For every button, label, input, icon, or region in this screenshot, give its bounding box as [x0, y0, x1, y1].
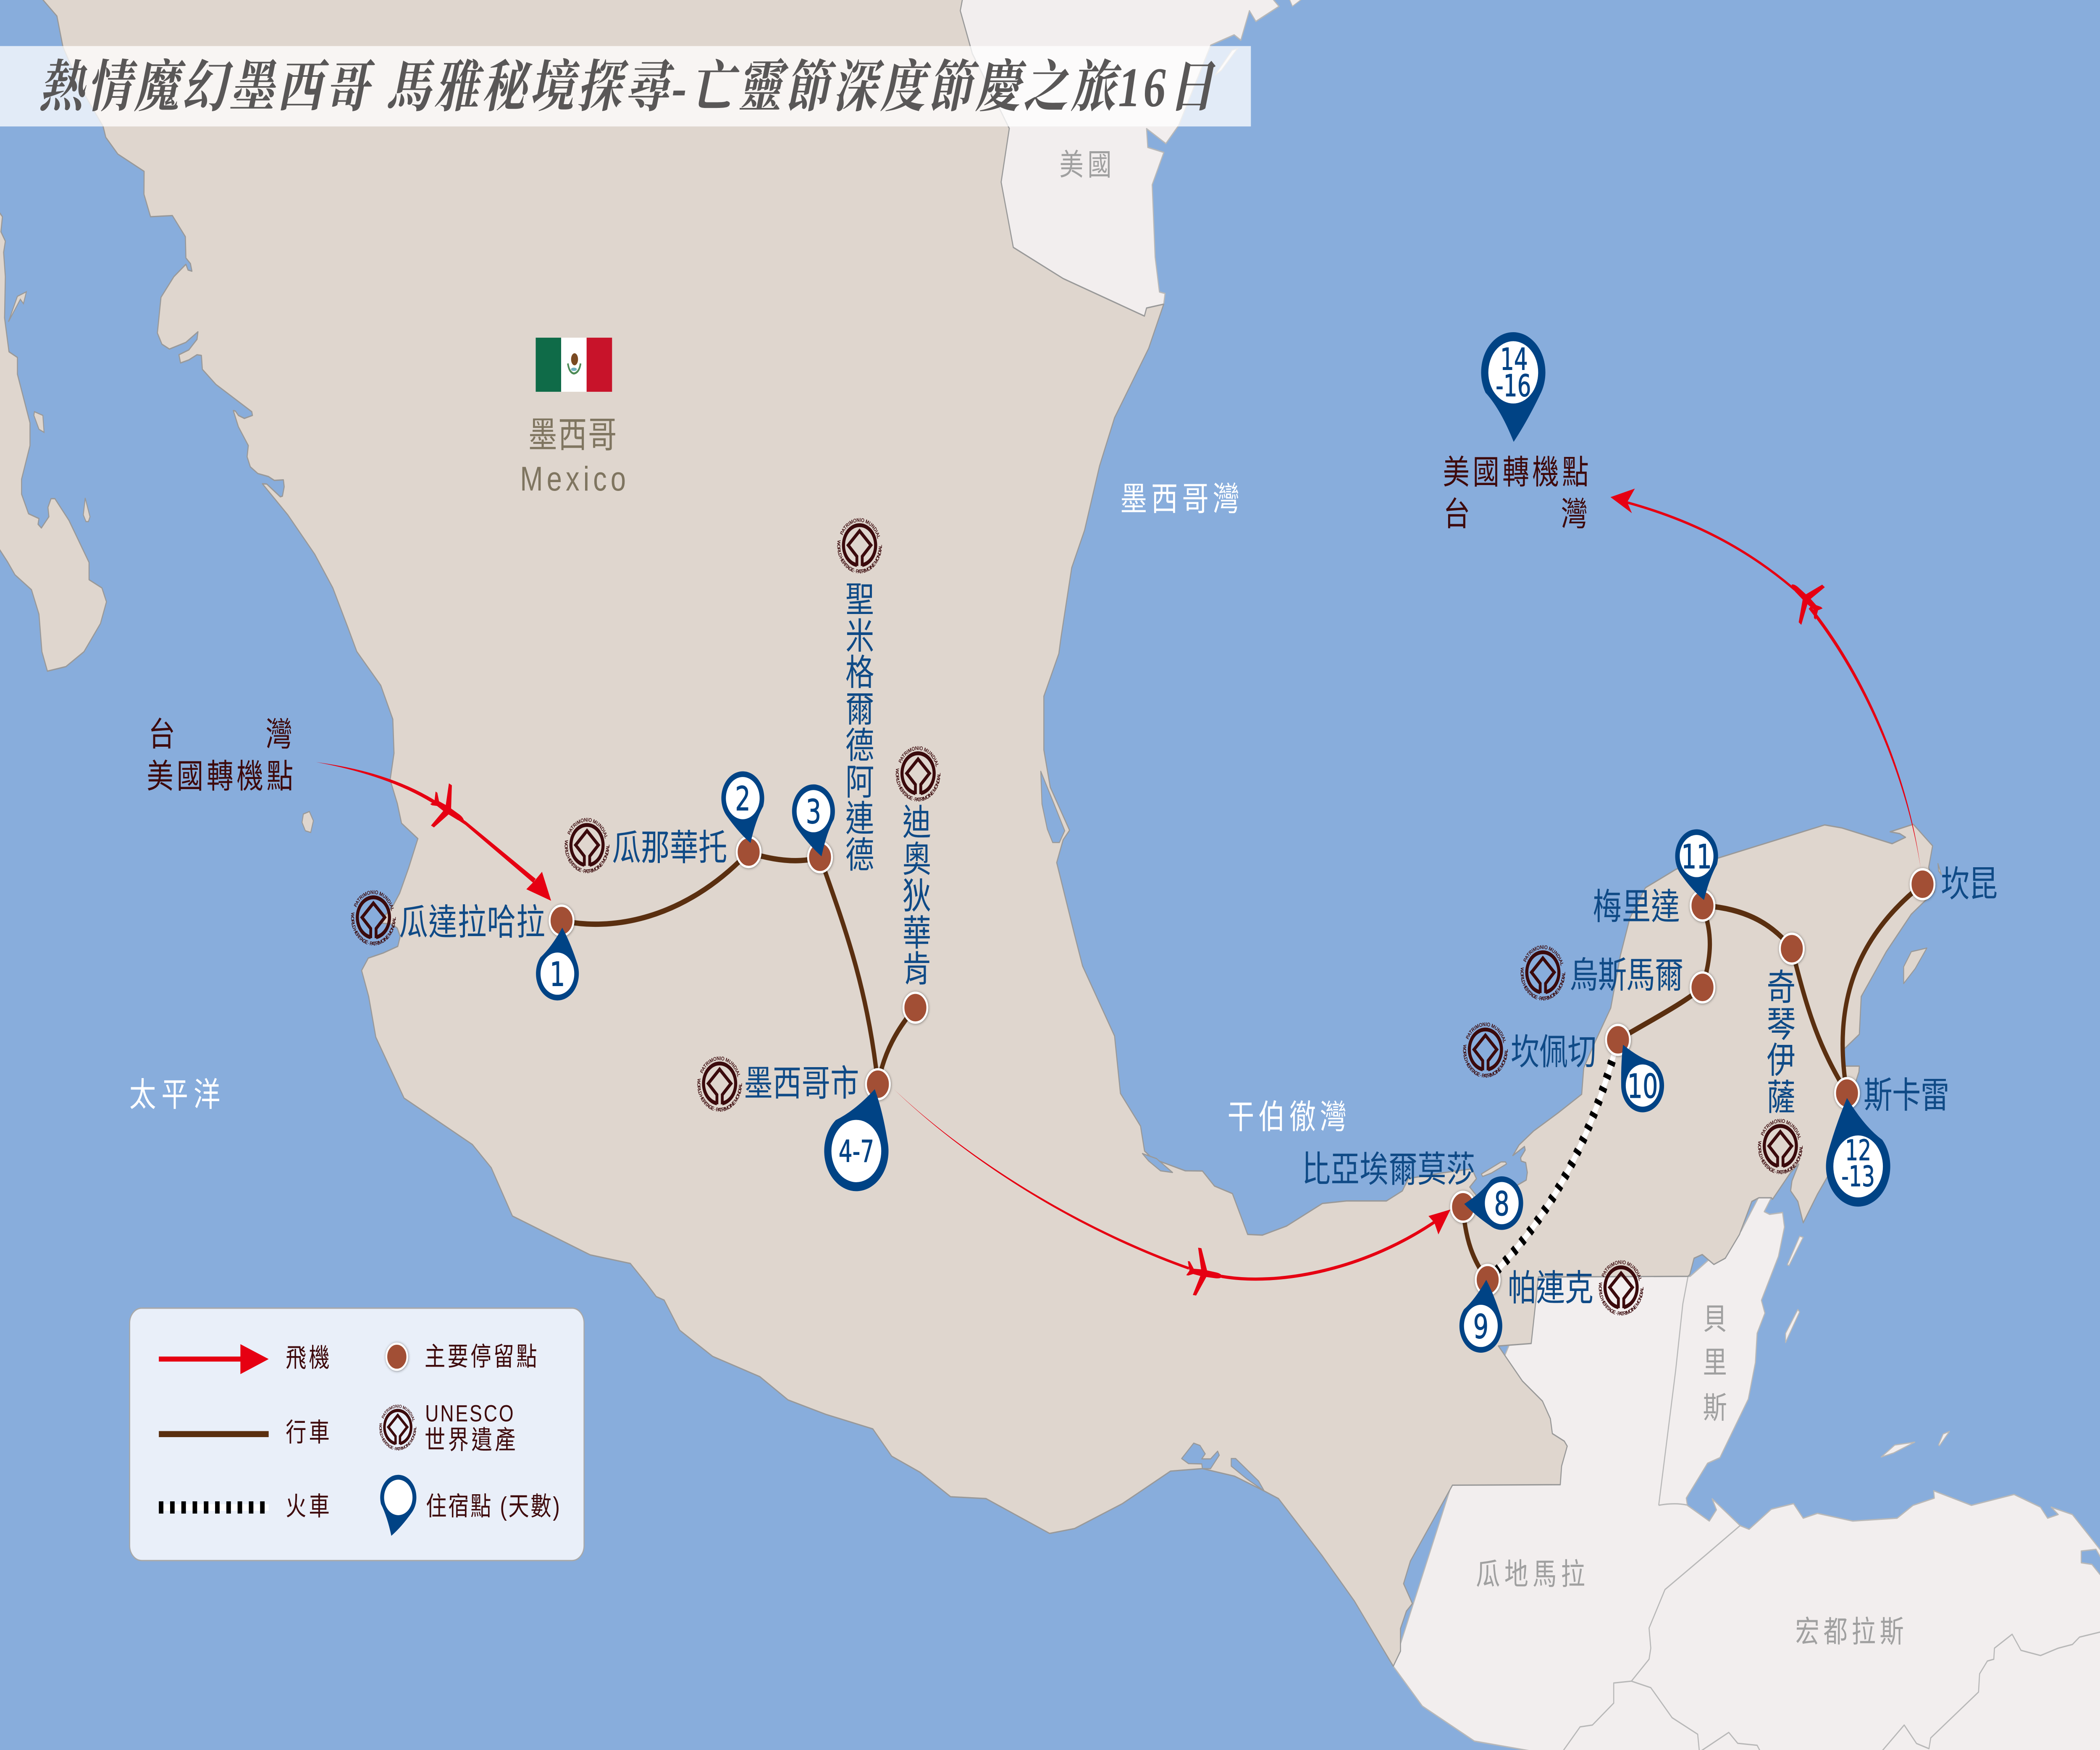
country label: Mexico (English): Mexico [520, 459, 626, 498]
pin: night 3 San Miguel de Allende: 3 [806, 793, 821, 832]
sea label: Gulf of Mexico: 墨西哥灣 [1120, 481, 1239, 518]
legend icon: accommodation pin [374, 1470, 420, 1541]
label: Mexico City: 墨西哥市 [744, 1064, 859, 1104]
icon: UNESCO Guadalajara: WORLD HERITAGE · PATRIMOINE MONDIAL [350, 912, 397, 947]
driving routes [562, 852, 1922, 1280]
country label: Mexico (Chinese): 墨西哥 [528, 415, 617, 455]
legend text: main stops: 主要停留點 [425, 1342, 537, 1371]
legend text: driving: 行車 [286, 1418, 330, 1447]
icon: UNESCO Teotihuacan: PATRIMONIO MUNDIAL [898, 745, 940, 768]
flight route: Cancun to transfer city [1611, 488, 1921, 868]
country label: Guatemala: 瓜地馬拉 [1476, 1557, 1585, 1591]
label: Teotihuacan (vertical): 迪奧狄華肯 [903, 803, 931, 989]
pin: night 3 San Miguel de Allende [788, 779, 843, 862]
pin: night 10 Campeche [1605, 1031, 1672, 1122]
map: Gulf of California islands [8, 292, 313, 832]
pin: night 8 Villahermosa [1464, 1176, 1523, 1231]
train route: Palenque to Campeche [1488, 1040, 1618, 1280]
country label: Belize (vertical): 貝里斯 [1703, 1302, 1727, 1425]
label: Xcaret: 斯卡雷 [1864, 1076, 1949, 1115]
legend text: train: 火車 [286, 1492, 330, 1521]
icon: UNESCO Uxmal [1520, 945, 1566, 1002]
icon: UNESCO Palenque: PATRIMONIO MUNDIAL [1601, 1259, 1642, 1282]
label: inbound Taiwan and US transfer [147, 716, 293, 795]
icon: UNESCO Chichen Itza: WORLD HERITAGE · PATRIMOINE MONDIAL [1757, 1141, 1803, 1175]
label: inbound Taiwan and US transfer: 美國轉機點 [147, 758, 293, 795]
legend text: UNESCO: UNESCO [425, 1400, 514, 1427]
icon: UNESCO Guanajuato: PATRIMONIO MUNDIAL [567, 817, 608, 839]
pin: nights 14-16 US transfer: -16 [1496, 369, 1531, 404]
icon: UNESCO Guanajuato [564, 817, 610, 874]
pin: night 10 Campeche: 10 [1628, 1067, 1658, 1106]
icon: UNESCO Mexico City: PATRIMONIO MUNDIAL [700, 1056, 741, 1078]
pin: night 1 Guadalajara [533, 924, 583, 1004]
label: San Miguel de Allende (vertical): 聖米格爾德阿連德 [845, 580, 874, 876]
pin: nights 14-16 US transfer: 14 [1500, 342, 1528, 377]
label: Palenque: 帕連克 [1508, 1268, 1593, 1308]
icon: UNESCO San Miguel de Allende [836, 517, 883, 575]
icon: UNESCO Chichen Itza [1757, 1118, 1803, 1175]
pin: night 1 Guadalajara: 1 [550, 955, 565, 994]
legend text: plane: 飛機 [286, 1343, 330, 1372]
label: Guadalajara: 瓜達拉哈拉 [399, 903, 545, 942]
label: outbound US transfer and Taiwan: 台灣 [1444, 496, 1588, 533]
legend: train line [159, 1504, 269, 1511]
map: neighbouring countries (Guatemala, Belize, Honduras) [1393, 1198, 2100, 1750]
pin: night 2 Guanajuato [717, 766, 772, 849]
legend text: world heritage: 世界遺產 [425, 1425, 516, 1454]
label: Villahermosa: 比亞埃爾莫莎 [1302, 1150, 1475, 1190]
icon: UNESCO Uxmal: PATRIMONIO MUNDIAL [1523, 945, 1564, 967]
map: Baja California peninsula [0, 210, 107, 671]
icon: UNESCO San Miguel de Allende: PATRIMONIO MUNDIAL [840, 517, 881, 540]
label: Cancun: 坎昆 [1941, 864, 1998, 904]
icon: UNESCO Campeche [1462, 1022, 1509, 1079]
legend icon: UNESCO: WORLD HERITAGE · PATRIMOINE MONDIAL [378, 1423, 417, 1451]
pin: nights 12-13 Xcaret: 12 [1845, 1134, 1871, 1167]
icon: UNESCO Chichen Itza: PATRIMONIO MUNDIAL [1760, 1118, 1802, 1140]
legend: plane arrow [159, 1344, 269, 1374]
country label: Honduras: 宏都拉斯 [1796, 1615, 1904, 1649]
label: Campeche: 坎佩切 [1511, 1032, 1596, 1072]
panel: legend [130, 1308, 584, 1561]
pin: nights 4-7 Mexico City [815, 1075, 905, 1203]
pin: night 9 Palenque: 9 [1473, 1307, 1488, 1346]
map: Caribbean and Campeche islands [1481, 863, 1941, 1176]
label: Merida: 梅里達 [1593, 887, 1680, 927]
legend text: accommodation: 住宿點 (天數) [426, 1492, 560, 1521]
pin: nights 14-16 US transfer [1481, 332, 1546, 442]
label: outbound US transfer and Taiwan [1443, 454, 1589, 533]
icon: UNESCO Teotihuacan [895, 745, 942, 803]
icon: UNESCO San Miguel de Allende: WORLD HERITAGE · PATRIMOINE MONDIAL [836, 540, 883, 575]
icon: UNESCO Teotihuacan: WORLD HERITAGE · PATRIMOINE MONDIAL [895, 768, 942, 803]
icon: UNESCO Mexico City [696, 1056, 743, 1113]
title: 熱情魔幻墨西哥 馬雅秘境探尋-亡靈節深度節慶之旅16日 [39, 57, 1215, 119]
label: inbound Taiwan and US transfer: 台灣 [148, 716, 292, 753]
sea label: Pacific Ocean: 太平洋 [129, 1076, 220, 1114]
flag of Mexico [536, 338, 612, 392]
sea label: Bay of Campeche: 干伯徹灣 [1228, 1099, 1347, 1136]
icon: UNESCO Guanajuato: WORLD HERITAGE · PATRIMOINE MONDIAL [564, 840, 610, 874]
icon: UNESCO Palenque: WORLD HERITAGE · PATRIMOINE MONDIAL [1598, 1282, 1644, 1317]
pin: night 2 Guanajuato: 2 [735, 780, 751, 819]
pin: nights 12-13 Xcaret: -13 [1841, 1160, 1875, 1193]
icon: UNESCO Guadalajara: PATRIMONIO MUNDIAL [353, 889, 395, 912]
pin: night 9 Palenque [1457, 1276, 1507, 1356]
label: Uxmal: 烏斯馬爾 [1570, 955, 1683, 995]
label: Guanajuato: 瓜那華托 [612, 828, 727, 868]
pin: night 8 Villahermosa: 8 [1494, 1185, 1509, 1224]
legend: driving line [159, 1431, 269, 1437]
icon: UNESCO Campeche: WORLD HERITAGE · PATRIMOINE MONDIAL [1462, 1044, 1509, 1079]
flight route: transfer city to Guadalajara [316, 762, 551, 901]
pin: nights 12-13 Xcaret [1816, 1090, 1896, 1214]
legend icon: UNESCO [378, 1404, 417, 1451]
map: coastal lagoons of Mexico [1041, 771, 1264, 1491]
flight route: Mexico City to Villahermosa [893, 1089, 1450, 1300]
pin: nights 4-7 Mexico City: 4-7 [839, 1134, 874, 1169]
label: outbound US transfer and Taiwan: 美國轉機點 [1443, 454, 1589, 491]
title band [0, 46, 1251, 126]
pin: night 11 Merida: 11 [1681, 838, 1712, 876]
map: Belize and Honduras islands [1785, 1236, 1950, 1457]
map: United States [960, 0, 1279, 316]
main stop markers [550, 837, 1935, 1295]
icon: UNESCO Guadalajara [350, 889, 397, 947]
icon: UNESCO Campeche: PATRIMONIO MUNDIAL [1465, 1022, 1507, 1044]
label: Chichen Itza (vertical): 奇琴伊薩 [1767, 968, 1796, 1118]
map: small US islands [1215, 0, 1305, 75]
country label: United States: 美國 [1059, 148, 1112, 182]
pin: night 11 Merida [1671, 824, 1725, 905]
icon: UNESCO Uxmal: WORLD HERITAGE · PATRIMOINE MONDIAL [1520, 967, 1566, 1002]
icon: UNESCO Palenque [1598, 1259, 1644, 1317]
legend icon: UNESCO: PATRIMONIO MUNDIAL [381, 1404, 416, 1422]
icon: UNESCO Mexico City: WORLD HERITAGE · PATRIMOINE MONDIAL [696, 1078, 743, 1113]
legend: stop marker [386, 1343, 407, 1370]
